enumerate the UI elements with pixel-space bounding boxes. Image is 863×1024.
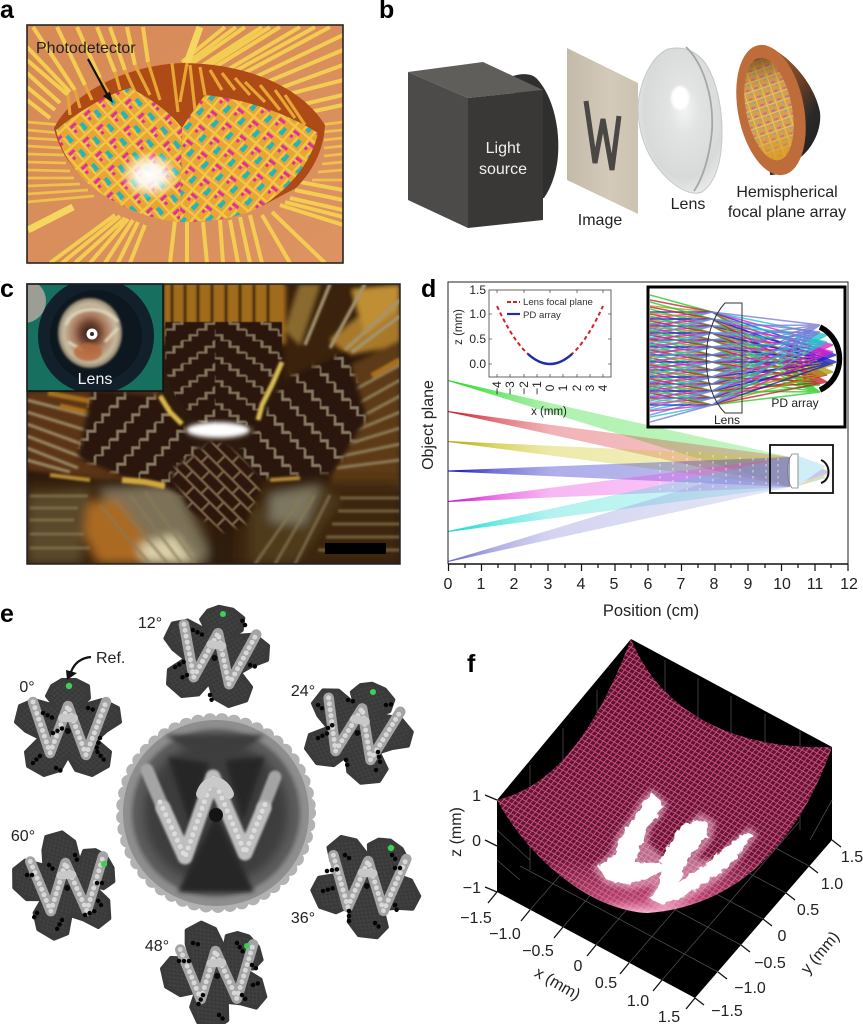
diagonal and side trace stripes	[27, 284, 400, 472]
legend PD array	[507, 313, 520, 315]
focal plane array interior	[737, 54, 801, 164]
x tick labels: 0	[543, 384, 557, 391]
W cells	[160, 777, 266, 857]
small lens detail box	[770, 445, 833, 493]
x tick labels: 2	[570, 384, 584, 391]
left mesh	[76, 392, 200, 496]
y tick labels: 0.0	[469, 357, 486, 371]
label: Lens: Lens	[714, 413, 740, 427]
plot frame	[448, 282, 848, 564]
reference pixel	[220, 611, 226, 617]
focal plane array rim	[726, 39, 816, 181]
x axis ticks	[488, 892, 695, 1009]
angle labels	[11, 615, 315, 955]
label: PD array: PD array	[771, 396, 819, 410]
angle labels: 24°	[291, 683, 315, 700]
label: Hemispherical focal plane array	[728, 184, 846, 221]
small lens	[788, 454, 798, 488]
panel label f: f	[467, 650, 476, 678]
W on image card	[586, 101, 619, 170]
label: Photodetector: Photodetector	[36, 40, 136, 57]
panel label c: c	[0, 275, 14, 303]
y tick labels: 1.5	[469, 283, 486, 297]
legend label: Lens focal plane	[523, 297, 593, 308]
y tick labels: 0	[778, 928, 787, 945]
panel a border	[27, 25, 343, 263]
left mesh of photodetectors	[56, 88, 182, 222]
x tick labels: 1.0	[627, 993, 649, 1010]
x axis	[448, 563, 848, 565]
x tick labels	[490, 381, 610, 395]
x tick labels: −1.5	[460, 910, 492, 927]
x tick labels: 5	[610, 576, 619, 593]
x tick labels: 9	[744, 576, 753, 593]
light beams	[448, 380, 790, 562]
light source top face	[408, 62, 543, 98]
z tick labels: −1	[463, 880, 481, 897]
axis title: Position (cm): Position (cm)	[603, 602, 699, 620]
lens aperture	[86, 328, 98, 340]
label: Light source: Light	[486, 140, 521, 157]
mid ring	[132, 729, 300, 897]
PD array curve	[528, 354, 572, 364]
panel e: reconstructed W images	[0, 597, 437, 1024]
circuit board	[27, 284, 163, 391]
large composite disc	[123, 720, 309, 906]
x tick labels: 7	[677, 576, 686, 593]
magnified background	[648, 287, 845, 427]
blurred lower foreground	[27, 482, 400, 564]
dropouts	[323, 855, 403, 927]
converging rays in small box	[798, 456, 829, 486]
x tick labels: −1	[530, 381, 544, 395]
cluster 60 degrees	[0, 816, 135, 954]
cluster 12 degrees	[154, 597, 276, 712]
cluster 24 degrees	[291, 665, 425, 794]
legend PD label: PD array	[523, 310, 561, 321]
angle labels: 48°	[145, 938, 169, 955]
cluster 0 degrees	[16, 680, 120, 775]
x tick labels: −2	[517, 381, 531, 395]
reference pixel	[388, 845, 394, 851]
lower centre mesh	[169, 440, 262, 534]
magnified PD array arc	[820, 327, 840, 390]
dropouts	[27, 855, 107, 929]
angle labels: 36°	[291, 910, 315, 927]
panel c border	[27, 284, 400, 564]
panel c: photograph of array	[2, 278, 400, 564]
y tick labels: 1.0	[469, 307, 486, 321]
y tick labels: 0.5	[469, 332, 486, 346]
scale bar	[325, 543, 386, 554]
y tick labels: −0.5	[754, 955, 786, 972]
dark photo base	[27, 284, 400, 564]
warm reflection	[74, 343, 102, 361]
y tick labels: 1.0	[821, 876, 843, 893]
x ticks	[448, 564, 848, 571]
centre W apex	[201, 782, 229, 794]
light source cylinder	[513, 74, 558, 198]
x tick labels: 1	[556, 384, 570, 391]
x tick labels: 11	[807, 576, 823, 593]
x tick labels: 12	[840, 576, 858, 593]
magnified rays	[650, 295, 836, 422]
x tick labels: 0	[444, 576, 453, 593]
center mesh	[165, 318, 285, 430]
panel label e: e	[0, 600, 14, 628]
x tick labels: 6	[644, 576, 653, 593]
label: Ref.: Ref.	[96, 650, 125, 667]
angle labels: 60°	[11, 828, 35, 845]
panel f: 3D mesh surface	[448, 639, 863, 1024]
dropouts	[318, 700, 394, 774]
pink mesh surface	[497, 639, 832, 913]
x tick labels: 4	[596, 384, 610, 391]
y tick labels: 1.5	[841, 849, 863, 866]
inset chart: focal plane curve	[453, 283, 611, 418]
reference pixel	[370, 689, 376, 695]
dropouts	[179, 943, 259, 1019]
panel a background	[27, 25, 343, 263]
left and right fine traces	[27, 122, 343, 202]
bright central reflection	[186, 422, 250, 438]
scalloped outer ring	[123, 720, 309, 906]
aperture centre	[90, 332, 94, 336]
inset border	[27, 284, 163, 391]
disc base	[123, 720, 309, 906]
image card	[567, 48, 638, 214]
x tick labels: −0.5	[522, 943, 554, 960]
x tick labels: 3	[544, 576, 553, 593]
magnified border	[648, 287, 845, 427]
x tick labels: 2	[510, 576, 519, 593]
angle labels: 12°	[138, 615, 162, 632]
z axis label: z (mm)	[453, 309, 465, 345]
x axis label: x (mm)	[531, 406, 567, 418]
z tick labels: 0	[472, 833, 481, 850]
lens	[638, 48, 722, 193]
dim W tips	[147, 770, 275, 808]
light source left face	[408, 72, 468, 228]
coin	[28, 284, 46, 322]
light source front face	[468, 90, 543, 228]
reference pixel	[101, 861, 107, 867]
light W	[163, 777, 264, 857]
label: Hemispherical focal plane array: Hemispherical	[736, 184, 838, 201]
y axis ticks	[695, 840, 841, 1005]
x tick labels: −1.0	[489, 926, 521, 943]
x tick labels: −3	[503, 381, 517, 395]
cluster 48 degrees	[147, 902, 287, 1024]
axis title: x: x (mm)	[531, 964, 583, 1004]
x tick labels: 0.5	[595, 975, 617, 992]
x tick labels: 0	[574, 958, 583, 975]
angle labels: 0°	[19, 679, 35, 696]
y tick labels: 0.5	[797, 902, 819, 919]
lens housing	[38, 278, 154, 394]
arrow: photodetector pointer	[88, 59, 108, 96]
inset: lens photograph	[28, 284, 162, 390]
interior shading	[737, 54, 801, 164]
panel d: ray tracing plot	[420, 282, 858, 620]
lens reflection	[58, 298, 122, 368]
axis title: Object plane: Object plane	[420, 380, 437, 470]
dropouts	[32, 708, 104, 772]
moire gaps in beams	[660, 450, 778, 492]
label: Image: Image	[578, 212, 622, 229]
wall and floor grid	[497, 660, 832, 980]
x tick labels: 1	[477, 576, 486, 593]
dark shading	[165, 735, 265, 892]
label: Hemispherical focal plane array: focal plane array	[728, 204, 846, 221]
central dark spot	[209, 808, 223, 822]
label: Lens: Lens	[671, 196, 705, 213]
hemispherical bowl dark upper wall	[54, 63, 325, 222]
z axis ticks	[485, 795, 497, 892]
y tick labels	[469, 283, 486, 371]
glare	[120, 151, 180, 199]
x tick labels: 3	[583, 384, 597, 391]
right mesh of photodetectors	[180, 95, 318, 222]
x tick labels	[444, 576, 858, 593]
x tick labels: −4	[490, 381, 504, 395]
inset: magnified lens ray diagram	[648, 287, 845, 427]
inset white background	[489, 290, 611, 377]
label: Lens: Lens	[78, 371, 112, 388]
x tick labels: 8	[710, 576, 719, 593]
axis title: y: y (mm)	[798, 929, 843, 978]
gold sparkle edges	[50, 362, 300, 486]
y tick labels: −1.0	[734, 980, 766, 997]
label: Light source: source	[479, 161, 527, 178]
arrow: reference pointer	[71, 657, 91, 672]
z tick labels: 1	[472, 788, 481, 805]
bright mesh band at bottom	[497, 639, 832, 913]
focal plane array back dome	[765, 45, 820, 175]
panel b: optical setup	[408, 39, 846, 229]
reference pixel	[66, 683, 72, 689]
small PD array arc	[821, 460, 828, 483]
gold radial traces	[27, 27, 343, 263]
blurred fan stripes	[30, 492, 400, 564]
lens rim band	[686, 47, 712, 191]
panel label d: d	[421, 275, 436, 303]
bright petals	[66, 310, 118, 350]
lens focal plane curve	[497, 306, 603, 364]
thick gold traces	[28, 27, 200, 230]
magnified lens outline	[706, 303, 742, 413]
arrow head	[103, 92, 113, 103]
x tick labels: 4	[577, 576, 586, 593]
x tick labels: 10	[773, 576, 791, 593]
black plot volume	[497, 639, 832, 998]
blurred upper photo zones	[27, 284, 400, 490]
W halo on surface	[592, 788, 758, 910]
y tick labels	[711, 849, 863, 1020]
arrow head	[66, 670, 77, 680]
legend lens focal plane	[507, 301, 520, 303]
traces crossing the bowl rim	[68, 62, 305, 125]
reference pixel	[244, 943, 250, 949]
right mesh	[240, 350, 369, 482]
x tick labels	[460, 910, 680, 1024]
dropouts	[175, 617, 257, 701]
label: Light source	[479, 140, 527, 178]
lens ring	[50, 290, 142, 382]
W light image on surface	[598, 793, 753, 905]
panel a: hemispherical photodetector render	[27, 25, 343, 263]
y tick labels: −1.5	[711, 1003, 743, 1020]
inset ticks	[489, 290, 611, 377]
axis title: z: z (mm)	[448, 807, 465, 857]
lens highlight	[671, 86, 689, 110]
z tick labels	[463, 788, 481, 897]
cluster 36 degrees	[297, 814, 437, 952]
center upper vertical traces	[165, 284, 283, 330]
inner gray	[144, 741, 288, 885]
